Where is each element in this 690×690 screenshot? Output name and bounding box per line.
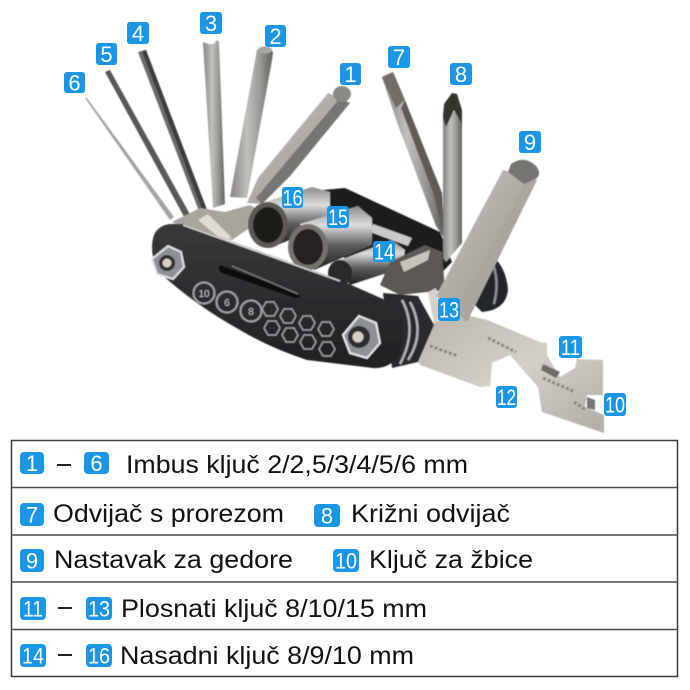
washer stack [383, 293, 434, 368]
handle marking numbers: 8 [248, 307, 254, 318]
row: bit and spoke key: Ključ za žbice [369, 546, 533, 574]
back plate [300, 188, 452, 290]
row: hex keys: 1 [26, 451, 38, 476]
row: sockets [20, 642, 414, 670]
screwdriver 7 [382, 72, 444, 238]
badge 9 [519, 130, 541, 155]
badge 7 [388, 45, 410, 70]
badge 3: 3 [205, 11, 217, 36]
tool photo drawing [85, 40, 604, 433]
right back washers [470, 250, 508, 312]
legend table [11, 440, 678, 676]
row: screwdrivers: 8 [321, 504, 333, 528]
row: screwdrivers: Odvijač s prorezom [53, 500, 284, 528]
row: sockets: Nasadni ključ 8/9/10 mm [120, 642, 414, 670]
badge 11: 11 [561, 335, 580, 360]
socket 15 [288, 206, 372, 270]
multi-tool illustration [64, 11, 626, 433]
wrench engravings [430, 338, 586, 410]
badge 7: 7 [393, 45, 405, 70]
badge 4 [127, 21, 149, 46]
badge 10: 10 [605, 392, 625, 418]
socket 16 [248, 187, 330, 248]
row: bit and spoke key: 10 [335, 548, 357, 574]
allen key 5 [105, 70, 192, 222]
badge 14: 14 [374, 240, 394, 264]
right pivot [380, 245, 445, 295]
row: hex keys: 6 [90, 451, 103, 476]
row: hex keys: Imbus ključ 2/2,5/3/4/5/6 mm [126, 451, 468, 479]
handle marking numbers [198, 289, 254, 318]
badge 4: 4 [132, 21, 144, 46]
badge 16: 16 [282, 186, 302, 210]
left nut [152, 246, 184, 279]
badge 3 [200, 11, 222, 36]
handle size markings [194, 282, 335, 356]
handle body [152, 224, 402, 368]
badge 2: 2 [269, 24, 282, 49]
handle marking numbers: 10 [198, 289, 210, 300]
row: flat wrenches: 11 [23, 596, 43, 622]
badge 6 [64, 70, 85, 96]
allen key 6 [85, 98, 174, 220]
allen key 4 [138, 50, 209, 219]
screwdriver 8 [443, 112, 462, 262]
badge 5: 5 [100, 42, 113, 67]
badge 13: 13 [439, 298, 459, 322]
row: sockets: 16 [88, 644, 110, 668]
row: bit and spoke key: Nastavak za gedore [54, 546, 293, 574]
badge 15: 15 [328, 205, 348, 230]
hex bit 9 [436, 170, 537, 322]
row: screwdrivers [20, 500, 510, 528]
badge 2 [265, 24, 286, 49]
badge 5 [96, 42, 117, 67]
badge 9: 9 [524, 130, 536, 155]
pivot bracket left [172, 205, 268, 240]
badge 1: 1 [344, 62, 357, 87]
row: flat wrenches: 13 [88, 596, 110, 622]
row: flat wrenches: Plosnati ključ 8/10/15 mm [121, 595, 427, 623]
badge 8: 8 [455, 62, 467, 87]
socket 14 [328, 240, 405, 286]
allen key 1 [247, 93, 350, 204]
handle marking numbers: 6 [224, 298, 230, 309]
row: screwdrivers: 7 [26, 502, 38, 528]
right nut [343, 316, 380, 358]
badge 12: 12 [497, 385, 516, 410]
row: flat wrenches [20, 595, 427, 623]
handle slot [218, 265, 300, 298]
allen key 3 [203, 40, 225, 208]
allen key 2 [230, 48, 273, 198]
badge 1 [340, 62, 361, 87]
badge 6: 6 [68, 70, 81, 96]
badge 8 [450, 62, 472, 87]
row: screwdrivers: Križni odvijač [351, 500, 510, 528]
row: sockets: 14 [22, 644, 44, 668]
table frame [12, 440, 678, 676]
flat wrench [413, 315, 604, 433]
row: bit and spoke key: 9 [26, 548, 38, 574]
row: bit and spoke key [20, 546, 533, 574]
